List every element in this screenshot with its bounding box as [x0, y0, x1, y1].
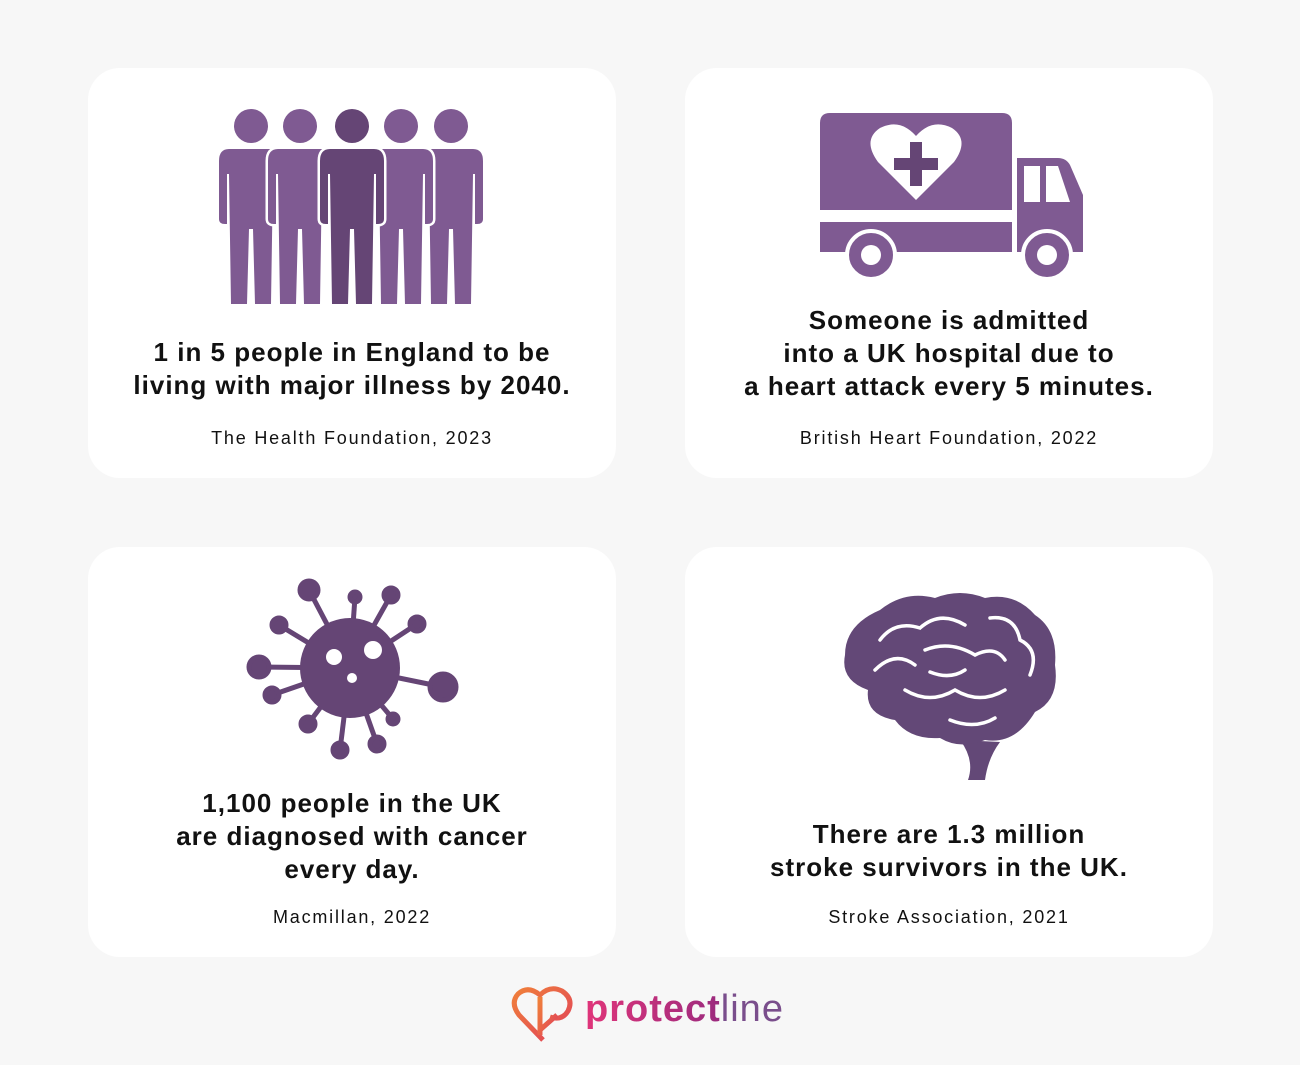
stat text: 1,100 people in the UK [202, 788, 502, 818]
icon: virus [246, 578, 458, 760]
stat text: stroke survivors in the UK. [770, 852, 1128, 882]
panel: stroke [685, 547, 1213, 957]
stat text: living with major illness by 2040. [133, 370, 571, 400]
panel: cancer [88, 547, 616, 957]
stat text [744, 305, 1154, 401]
icon: brain [844, 593, 1056, 780]
brand name: protectline [585, 988, 784, 1030]
source: Macmillan, 2022 [273, 907, 431, 927]
logo [512, 986, 784, 1042]
stat text: 1 in 5 people in England to be [154, 337, 550, 367]
stat text: a heart attack every 5 minutes. [744, 371, 1154, 401]
source: Stroke Association, 2021 [828, 907, 1070, 927]
icon: ambulance [820, 113, 1083, 277]
stat text: Someone is admitted [809, 305, 1089, 335]
panel: heart attack [685, 68, 1213, 478]
stat text: There are 1.3 million [813, 819, 1085, 849]
icon: people [219, 109, 483, 304]
stat text [176, 788, 528, 884]
stat text: into a UK hospital due to [783, 338, 1115, 368]
stat text [770, 819, 1128, 882]
stat text: are diagnosed with cancer [176, 821, 528, 851]
source: The Health Foundation, 2023 [211, 428, 493, 448]
panel: illness [88, 68, 616, 478]
stat text [133, 337, 571, 400]
icon: heart logo [512, 986, 573, 1042]
stat text: every day. [284, 854, 420, 884]
source: British Heart Foundation, 2022 [800, 428, 1098, 448]
